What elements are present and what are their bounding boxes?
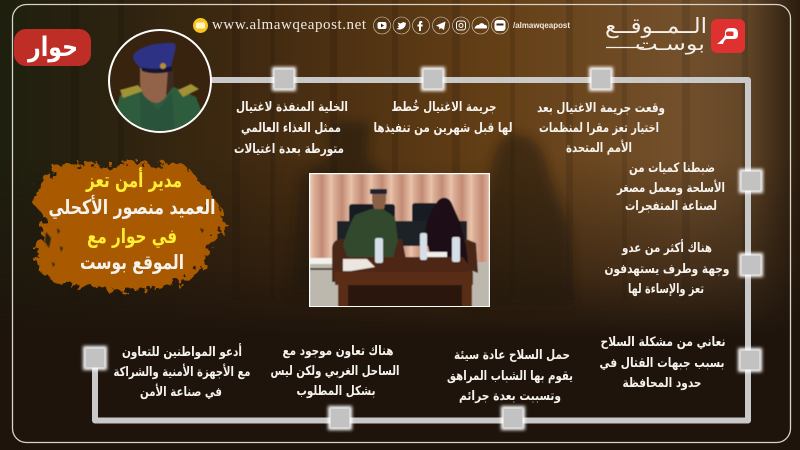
item: cooperation with west coast	[270, 344, 400, 399]
item: more than one enemy	[604, 239, 730, 297]
item: crime after choosing Taiz: وقعت جريمة الاغتيال بعد	[537, 101, 665, 116]
logo mark	[711, 19, 745, 53]
logo wordmark: بوسـت	[635, 34, 705, 55]
item: more than one enemy: هناك أكثر من عدو	[621, 239, 712, 256]
icon: mail	[193, 18, 208, 33]
title: line 2: العميد منصور الأكحلي	[48, 194, 216, 220]
item: crime planned: جريمة الاغتيال خُطط	[392, 99, 496, 115]
item: carrying weapons: يقوم بها الشباب المراهق	[447, 369, 573, 384]
item: weapons seized: الأسلحة ومعمل مصغر	[616, 179, 725, 196]
center photo	[309, 173, 490, 308]
item: weapons seized: ضبطنا كميات من	[629, 161, 715, 176]
item: crime after choosing Taiz: اختيار تعز مقرا لمنظمات	[539, 121, 659, 136]
item: carrying weapons	[447, 348, 573, 404]
timeline track	[95, 80, 748, 420]
logo wordmark	[605, 14, 707, 55]
item: carrying weapons: وتسببت بعدة جرائم	[459, 389, 561, 404]
item: cooperation with west coast: بشكل المطلوب	[296, 384, 376, 399]
item: cell behind assassination: الخلية المنفذة لاغتيال	[236, 100, 348, 115]
item: weapons seized	[616, 161, 725, 214]
item: call to citizens: أدعو المواطنين للتعاون	[122, 343, 242, 360]
header: website	[193, 17, 367, 33]
title blob	[32, 162, 224, 291]
item: cooperation with west coast: الساحل الغربي ولكن ليس	[270, 364, 400, 379]
item: weapons problem: نعاني من مشكلة السلاح	[600, 335, 726, 350]
item: weapons problem	[600, 335, 726, 391]
item: call to citizens: في صناعة الأمن	[140, 383, 222, 400]
item: cell behind assassination: متورطة بعدة اغتيالات	[234, 142, 344, 157]
logo	[605, 14, 745, 55]
background wash and silhouettes	[0, 0, 800, 322]
timeline nodes	[83, 67, 763, 430]
title: line 4: الموقع بوست	[80, 250, 184, 274]
item: crime after choosing Taiz	[537, 101, 665, 156]
portrait	[109, 30, 211, 137]
item: cell behind assassination	[234, 100, 348, 157]
item: weapons seized: لصناعة المتفجرات	[625, 199, 717, 214]
item: cell behind assassination: ممثل الغذاء العالمي	[241, 121, 341, 136]
item: more than one enemy: وجهة وطرف يستهدفون	[604, 262, 730, 277]
logo wordmark: الــمــوقــع	[605, 14, 707, 38]
title: line 1: مدير أمن تعز	[85, 166, 182, 192]
badge: حوار: حوار	[26, 32, 78, 63]
item: carrying weapons: حمل السلاح عادة سيئة	[454, 348, 570, 363]
item: weapons problem: حدود المحافظة	[622, 376, 702, 391]
social icons	[374, 17, 508, 34]
title: line 3: في حوار مع	[87, 224, 177, 249]
website url: www.almawqeapost.net	[212, 17, 367, 33]
item: crime planned: لها قبل شهرين من تنفيذها	[374, 121, 512, 136]
item: more than one enemy: تعز والإساءة لها	[628, 282, 704, 297]
item: crime planned	[374, 99, 512, 136]
item: call to citizens	[114, 343, 250, 400]
badge: حوار	[14, 29, 91, 66]
item: weapons problem: بسبب جبهات القتال في	[600, 356, 724, 371]
social handle: /almawqeapost	[513, 21, 570, 30]
item: cooperation with west coast: هناك تعاون موجود مع	[282, 344, 394, 359]
item: call to citizens: مع الأجهزة الأمنية والشراكة	[114, 363, 250, 380]
item: crime after choosing Taiz: الأمم المتحدة	[566, 139, 632, 156]
